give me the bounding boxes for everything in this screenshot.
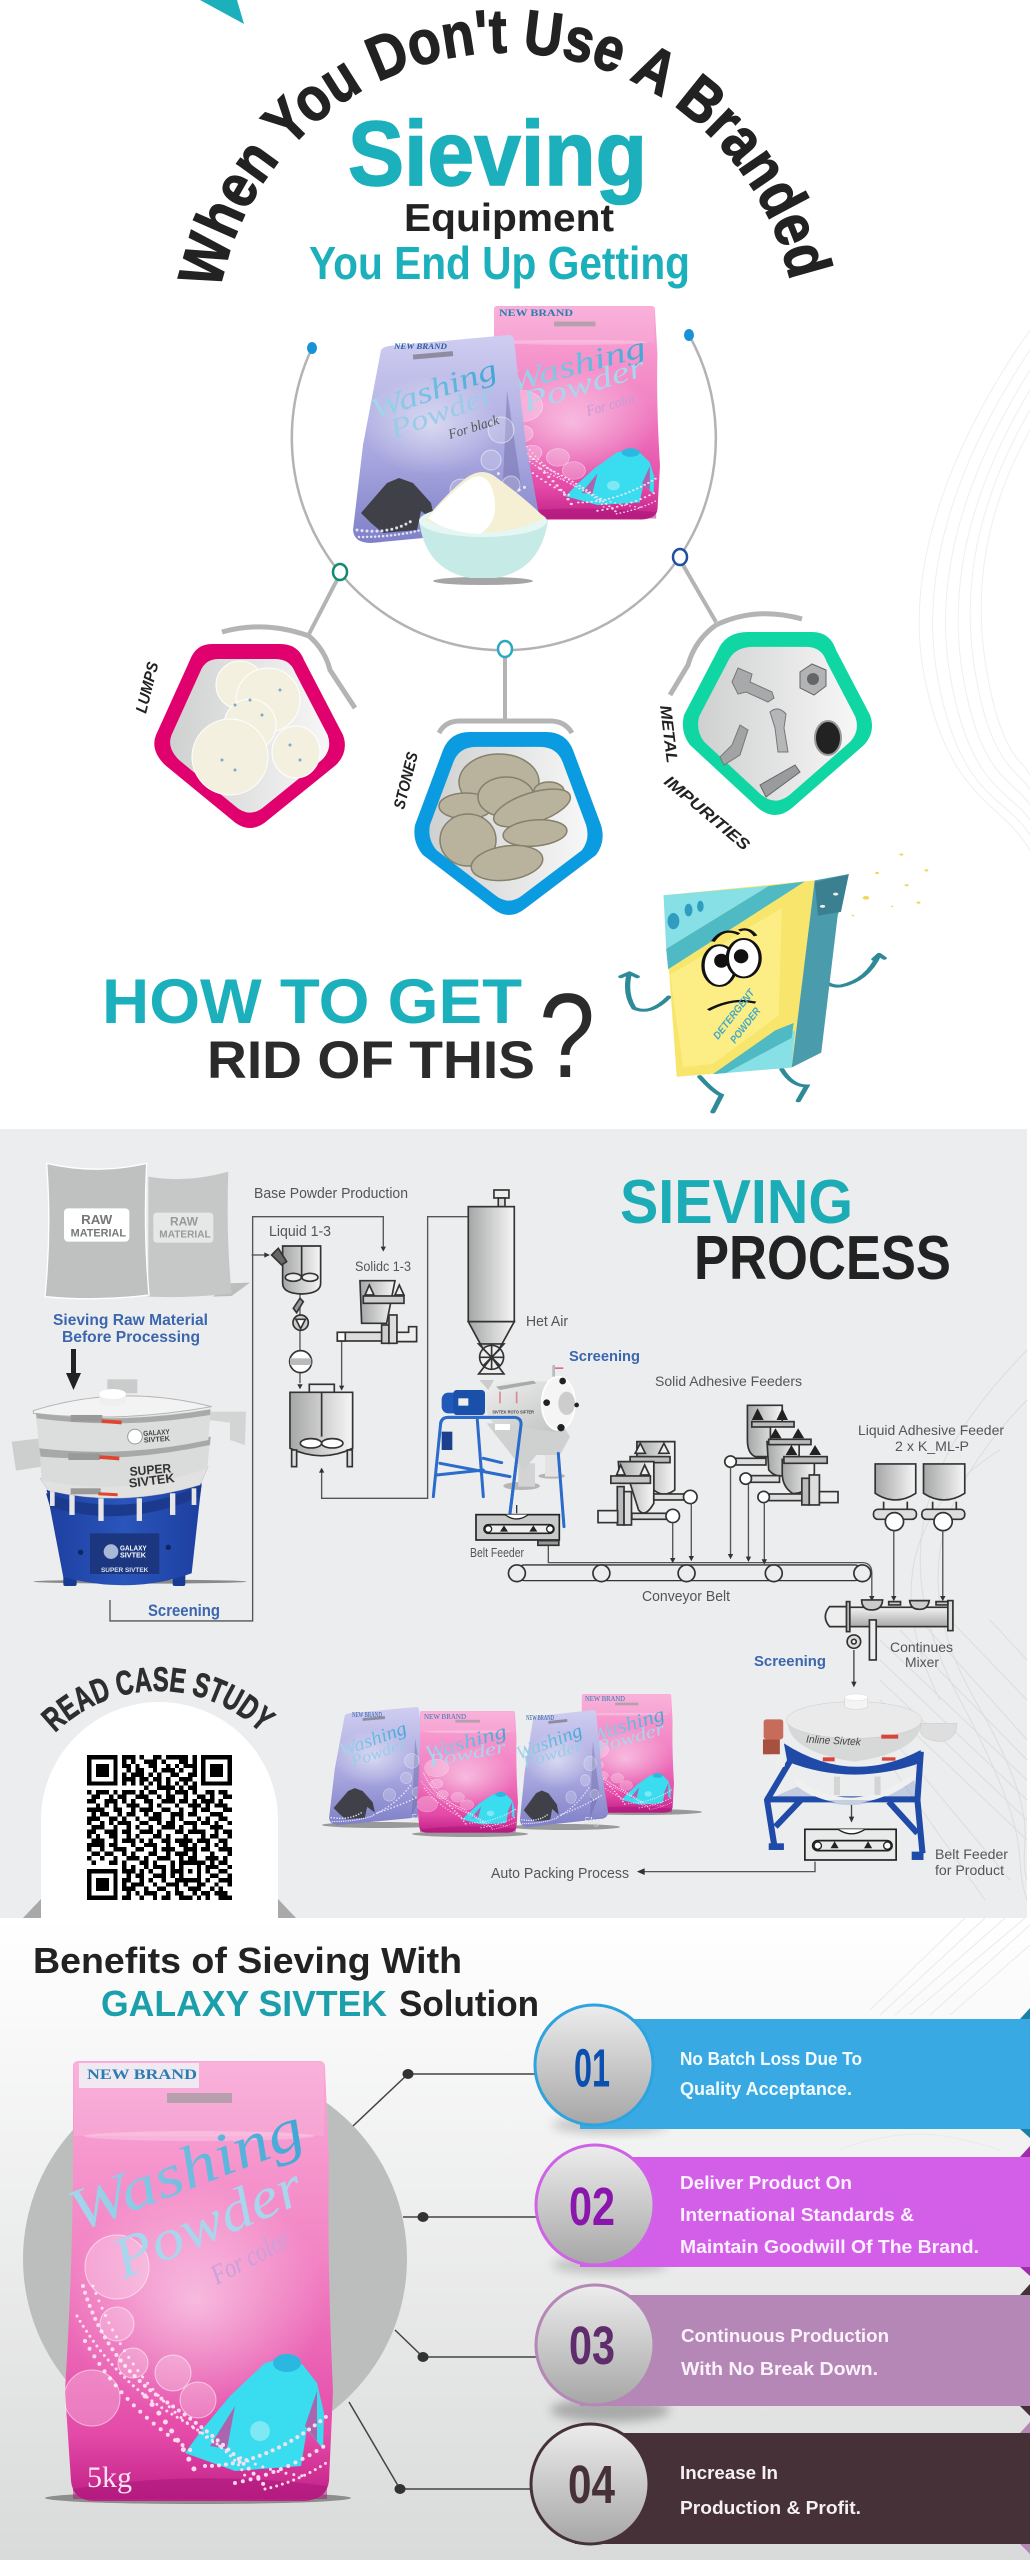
machine: super sivtek: SIVTEK xyxy=(128,1471,176,1491)
curved text: read case study: READ CASE STUDY xyxy=(40,1666,277,1732)
small pink bag: Washing xyxy=(422,1721,509,1765)
label: metal: METAL xyxy=(656,704,680,764)
small pink bag: NEW BRAND xyxy=(424,1713,466,1721)
small purple bag xyxy=(329,1707,433,1825)
machine: rotary sifter: SIVTEK ROTO SIFTER xyxy=(492,1409,535,1414)
benefit 04: 04 xyxy=(568,2455,615,2515)
small purple bag: 5kg xyxy=(411,1812,427,1824)
raw material bags: MATERIAL xyxy=(159,1229,211,1240)
benefit 04: Production & Profit. xyxy=(680,2498,861,2518)
machine: super sivtek: SUPER SIVTEK xyxy=(101,1567,149,1574)
text: sieving raw material: Before Processing xyxy=(62,1329,200,1346)
label: belt feeder for product xyxy=(935,1846,1008,1878)
product: pink washing powder bag xyxy=(488,306,660,520)
small pink bag back: Powder xyxy=(592,1718,668,1757)
heading: You End Up Getting: You End Up Getting xyxy=(309,237,690,289)
products: packed bags xyxy=(322,1694,702,1837)
product: purple washing powder bag xyxy=(353,335,539,543)
heading: Equipment: Equipment xyxy=(404,197,614,240)
icon: stones xyxy=(439,754,575,885)
curved title: When You Don't Use A Branded xyxy=(177,10,834,282)
connector lines xyxy=(349,2069,537,2494)
arc connecting ring xyxy=(292,329,716,650)
machine: inline sivtek: Inline Sivtek xyxy=(806,1734,862,1748)
label: screening (sieve): Screening xyxy=(148,1601,220,1620)
product: pink washing powder bag: For color xyxy=(584,390,638,420)
product: pink washing powder bag: NEW BRAND xyxy=(499,308,574,318)
small purple bag: Powder xyxy=(347,1734,409,1771)
benefit 01: Quality Acceptance. xyxy=(680,2079,852,2099)
benefit 03: With No Break Down. xyxy=(681,2359,878,2379)
heading: how to get rid of this: RID OF THIS xyxy=(207,1031,535,1090)
product: pink washing powder bag: Washing xyxy=(505,331,649,399)
small purple bag front: 5kg xyxy=(584,1815,600,1827)
product: purple washing powder bag: For black xyxy=(446,413,502,443)
small pink bag back xyxy=(579,1694,674,1813)
label: belt feeder: Belt Feeder xyxy=(470,1546,524,1560)
panel: sieving process xyxy=(0,1129,1027,1918)
label: screening (rotary): Screening xyxy=(569,1348,640,1365)
small purple bag front: Washing xyxy=(513,1720,585,1765)
benefit 02: 02 xyxy=(569,2177,615,2237)
small purple bag: Washing xyxy=(337,1718,409,1762)
label: belt feeder for product: Belt Feeder xyxy=(935,1846,1008,1862)
label: impurities: IMPURITIES xyxy=(660,773,753,854)
machine: super sivtek: SUPER xyxy=(129,1461,172,1479)
benefit 03: Continuous Production xyxy=(681,2326,889,2346)
gray circle behind bag xyxy=(23,2067,407,2451)
small purple bag front xyxy=(513,1710,608,1827)
label: auto packing process: Auto Packing Process xyxy=(491,1865,629,1882)
label: het air: Het Air xyxy=(526,1313,568,1330)
product: purple washing powder bag: Washing xyxy=(367,353,501,427)
benefits background xyxy=(0,1918,1030,2560)
panel: benefits xyxy=(0,1666,1030,2560)
text: sieving raw material xyxy=(53,1312,208,1346)
QR panel: read case study xyxy=(23,1666,296,1918)
label: base powder production: Base Powder Production xyxy=(254,1185,408,1202)
label: continues mixer: Continues xyxy=(890,1639,953,1655)
raw material bags xyxy=(45,1163,250,1299)
diagram: conveyor belt with feeders xyxy=(508,1405,965,1601)
panel: top hero section xyxy=(102,0,928,1114)
heading: sieving process xyxy=(620,1168,951,1293)
heading: benefits: GALAXY SIVTEK xyxy=(101,1983,387,2024)
panel: lumps xyxy=(133,644,345,828)
connector: lumps xyxy=(222,564,355,708)
arrow: into sieve xyxy=(66,1349,81,1390)
machine: super sivtek: GALAXY xyxy=(120,1544,147,1553)
benefit 02: Maintain Goodwill Of The Brand. xyxy=(680,2237,979,2257)
diagram: continuous mixer xyxy=(825,1600,953,1660)
connector: metal impurities xyxy=(670,549,802,695)
small pink bag: Powder xyxy=(426,1736,509,1771)
small purple bag: NEW BRAND xyxy=(352,1711,382,1719)
benefit 01 xyxy=(535,2005,1030,2138)
heading: benefits: Solution xyxy=(399,1983,539,2024)
raw material bags: RAW xyxy=(170,1214,199,1228)
benefit 01: No Batch Loss Due To xyxy=(680,2049,862,2069)
benefit 02: Deliver Product On xyxy=(680,2173,852,2193)
machine: super sivtek: SIVTEK xyxy=(143,1434,171,1445)
diagram: liquid tank, solid feeder and mixing tank xyxy=(272,1246,417,1467)
label: liquid adhesive feeder xyxy=(858,1422,1004,1454)
machine: super sivtek: SIVTEK xyxy=(120,1550,147,1559)
small pink bag xyxy=(417,1711,518,1833)
label: continues mixer: Mixer xyxy=(905,1654,939,1670)
product: powder bowl xyxy=(419,472,548,585)
machine: rotary sifter xyxy=(433,1365,579,1540)
product: large pink bag: For color xyxy=(205,2224,295,2292)
panel: stones xyxy=(391,732,603,915)
benefit 03 xyxy=(536,2284,1030,2422)
label: liquid adhesive feeder: Liquid Adhesive Feeder xyxy=(858,1422,1004,1438)
label: conveyor belt: Conveyor Belt xyxy=(642,1589,730,1605)
product: large pink bag: Washing xyxy=(59,2094,312,2244)
icon: metal parts xyxy=(720,664,841,797)
product: large pink bag: NEW BRAND xyxy=(87,2067,197,2083)
small pink bag back: NEW BRAND xyxy=(585,1695,625,1703)
machine: inline sivtek xyxy=(763,1650,957,1860)
corner accent triangle xyxy=(200,0,244,24)
label: liquid: Liquid 1-3 xyxy=(269,1223,331,1240)
heading: benefits xyxy=(33,1940,539,2024)
icon: detergent box character: POWDER xyxy=(728,1005,763,1046)
label: screening (inline): Screening xyxy=(754,1653,826,1670)
QR code xyxy=(87,1755,232,1900)
arrow: to auto packing xyxy=(637,1862,815,1875)
benefit 02: International Standards & xyxy=(680,2205,914,2225)
label: stones: STONES xyxy=(391,750,422,811)
product: purple washing powder bag: Powder xyxy=(385,379,498,446)
heading: how to get rid of this: ? xyxy=(539,969,595,1103)
icon: detergent box character xyxy=(621,853,928,1112)
flow line: screening to base powder xyxy=(110,1217,468,1621)
benefit 04 xyxy=(531,2422,1030,2554)
heading: how to get rid of this xyxy=(102,967,595,1103)
heading: benefits: Benefits of Sieving With xyxy=(33,1940,462,1981)
label: liquid adhesive feeder: 2 x K_ML-P xyxy=(895,1438,969,1454)
heading: sieving process: SIEVING xyxy=(620,1168,853,1237)
panel: metal impurities xyxy=(656,632,872,854)
label: belt feeder for product: for Product xyxy=(935,1862,1004,1878)
label: solids: Solidc 1-3 xyxy=(355,1259,411,1274)
product: purple washing powder bag: NEW BRAND xyxy=(393,342,447,351)
small purple bag front: NEW BRAND xyxy=(526,1714,554,1722)
label: continues mixer xyxy=(890,1639,953,1670)
product: large pink bag: 5kg xyxy=(87,2461,132,2494)
heading: how to get rid of this: HOW TO GET xyxy=(102,967,522,1037)
icon: detergent box character: DETERGENT xyxy=(711,986,758,1042)
product: large pink bag xyxy=(45,2061,351,2504)
label: solid adhesive feeders: Solid Adhesive Feeders xyxy=(655,1373,802,1389)
text: sieving raw material: Sieving Raw Material xyxy=(53,1312,208,1329)
small pink bag back: Washing xyxy=(588,1704,667,1747)
heading: sieving process: PROCESS xyxy=(694,1224,951,1293)
raw material bags: RAW xyxy=(81,1212,113,1227)
raw material bags: MATERIAL xyxy=(71,1227,126,1239)
diagram: silo xyxy=(468,1190,514,1374)
icon: lumps xyxy=(192,661,320,795)
benefit 02 xyxy=(536,2145,1030,2276)
machine: super sivtek: GALAXY xyxy=(143,1427,170,1438)
connector: stones xyxy=(439,641,572,733)
product: pink washing powder bag: Powder xyxy=(517,350,649,419)
label: lumps: LUMPS xyxy=(133,660,163,715)
small purple bag front: Powder xyxy=(520,1736,585,1772)
benefit 04: Increase In xyxy=(680,2463,778,2483)
process background xyxy=(0,1129,1027,1918)
product: large pink bag: Powder xyxy=(102,2153,313,2291)
benefit 01: 01 xyxy=(574,2038,610,2098)
heading: Sieving: Sieving xyxy=(348,103,647,205)
machine: super sivtek xyxy=(12,1379,247,1586)
benefit 03: 03 xyxy=(569,2316,615,2376)
